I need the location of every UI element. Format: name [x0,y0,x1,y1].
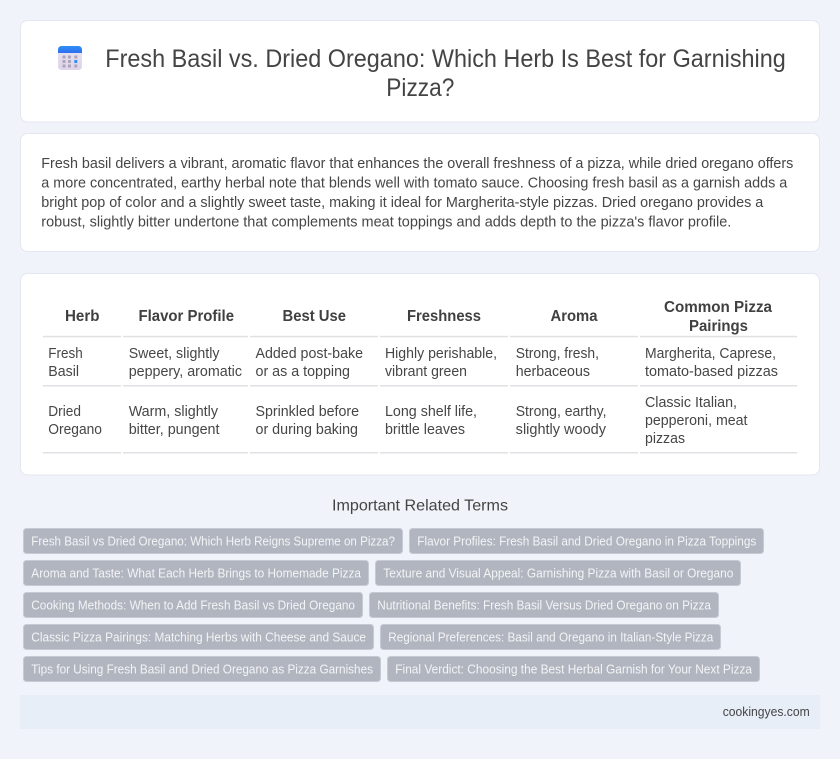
chip: final verdict: Final Verdict: Choosing the Best Herbal Garnish for Your Next Pizza [395,662,753,676]
panel: comparison table [20,274,820,475]
chip: aroma and taste: Aroma and Taste: What Each Herb Brings to Homemade Pizza [31,566,362,580]
table header row: Freshness [407,308,481,325]
chip: regional preferences: Regional Preferences: Basil and Oregano in Italian-Style Pizza [388,630,714,644]
chip: texture [376,560,740,586]
table row: dried oregano: Oregano [48,422,102,438]
table header row: Herb [65,308,100,325]
table row: dried oregano: or during baking [256,422,358,438]
table row: dried oregano: pizzas [645,431,685,447]
table row: fresh basil: Highly perishable, [385,346,497,362]
intro text: Fresh basil delivers a vibrant, aromatic flavor that enhances the overall freshness of a pizza, while dried oregano offers [41,156,793,172]
table row: dried oregano: Strong, earthy, [516,404,606,420]
table row: fresh basil: Fresh [48,346,83,362]
chip: nutritional benefits: Nutritional Benefits: Fresh Basil Versus Dried Oregano on Pizza [377,598,712,612]
footer bar [20,695,820,729]
intro text [41,156,793,230]
table row: dried oregano: Classic Italian, [645,395,737,411]
title [105,45,786,102]
chip: nutritional benefits [370,592,718,618]
table row: dried oregano: slightly woody [516,422,607,438]
chip: flavor profiles: Flavor Profiles: Fresh Basil and Dried Oregano in Pizza Toppings [417,534,757,548]
chip: regional preferences [380,624,720,650]
chip: tips: Tips for Using Fresh Basil and Dried Oregano as Pizza Garnishes [31,662,373,676]
table row: fresh basil: Margherita, Caprese, [645,346,776,362]
table row: fresh basil: Sweet, slightly [129,346,220,362]
table row: fresh basil: Basil [48,364,79,380]
table header row: Common Pizza [664,299,772,316]
chip: tips [24,656,380,682]
table header row [65,299,772,335]
chip: herb reigns: Fresh Basil vs Dried Oregano: Which Herb Reigns Supreme on Pizza? [31,534,395,548]
footer source: cookingyes.com [723,705,810,719]
header panel [20,20,820,122]
table row: dried oregano [48,395,748,447]
intro text: a more concentrated, earthy herbal note that blends well with tomato sauce. Choosing fresh basil as a garnish adds a [41,176,787,192]
chip: classic pairings [24,624,374,650]
table row: dried oregano: Dried [48,404,81,420]
chip: herb reigns [24,528,402,554]
title: Fresh Basil vs. Dried Oregano: Which Herb Is Best for Garnishing [105,45,786,73]
chip: final verdict [388,656,760,682]
chip: cooking methods: Cooking Methods: When to Add Fresh Basil vs Dried Oregano [31,598,355,612]
table header row: Flavor Profile [138,308,234,325]
chip: flavor profiles [410,528,764,554]
table row: fresh basil: or as a topping [256,364,350,380]
related term chips [24,528,764,682]
table row: dried oregano: Long shelf life, [385,404,477,420]
chip: texture: Texture and Visual Appeal: Garnishing Pizza with Basil or Oregano [383,566,733,580]
intro text: robust, slightly bitter undertone that complements meat toppings and adds depth to the pizza's flavor profile. [41,214,731,230]
table row: fresh basil [48,346,778,380]
table row: dried oregano: bitter, pungent [129,422,220,438]
table row: fresh basil: Strong, fresh, [516,346,599,362]
table row: fresh basil: herbaceous [516,364,590,380]
table row: dried oregano: Warm, slightly [129,404,219,420]
table row: fresh basil: peppery, aromatic [129,364,242,380]
chip: classic pairings: Classic Pizza Pairings: Matching Herbs with Cheese and Sauce [31,630,366,644]
table row: fresh basil: vibrant green [385,364,467,380]
intro text: bright pop of color and a slightly sweet taste, making it ideal for Margherita-style pizzas. Dried oregano provides a [41,195,763,211]
panel: intro paragraph [20,134,820,252]
table row: dried oregano: brittle leaves [385,422,465,438]
icon: calendar [58,46,82,70]
table row: dried oregano: Sprinkled before [256,404,359,420]
table header row: Aroma [550,308,598,325]
table row: fresh basil: Added post-bake [256,346,363,362]
table row: dried oregano: pepperoni, meat [645,413,748,429]
table row: fresh basil: tomato-based pizzas [645,364,778,380]
table header row: Best Use [282,308,346,325]
table header row: Pairings [689,318,748,335]
chip: cooking methods [24,592,362,618]
chip: aroma and taste [24,560,368,586]
related terms heading: Important Related Terms [332,498,508,514]
title: Pizza? [386,74,454,102]
